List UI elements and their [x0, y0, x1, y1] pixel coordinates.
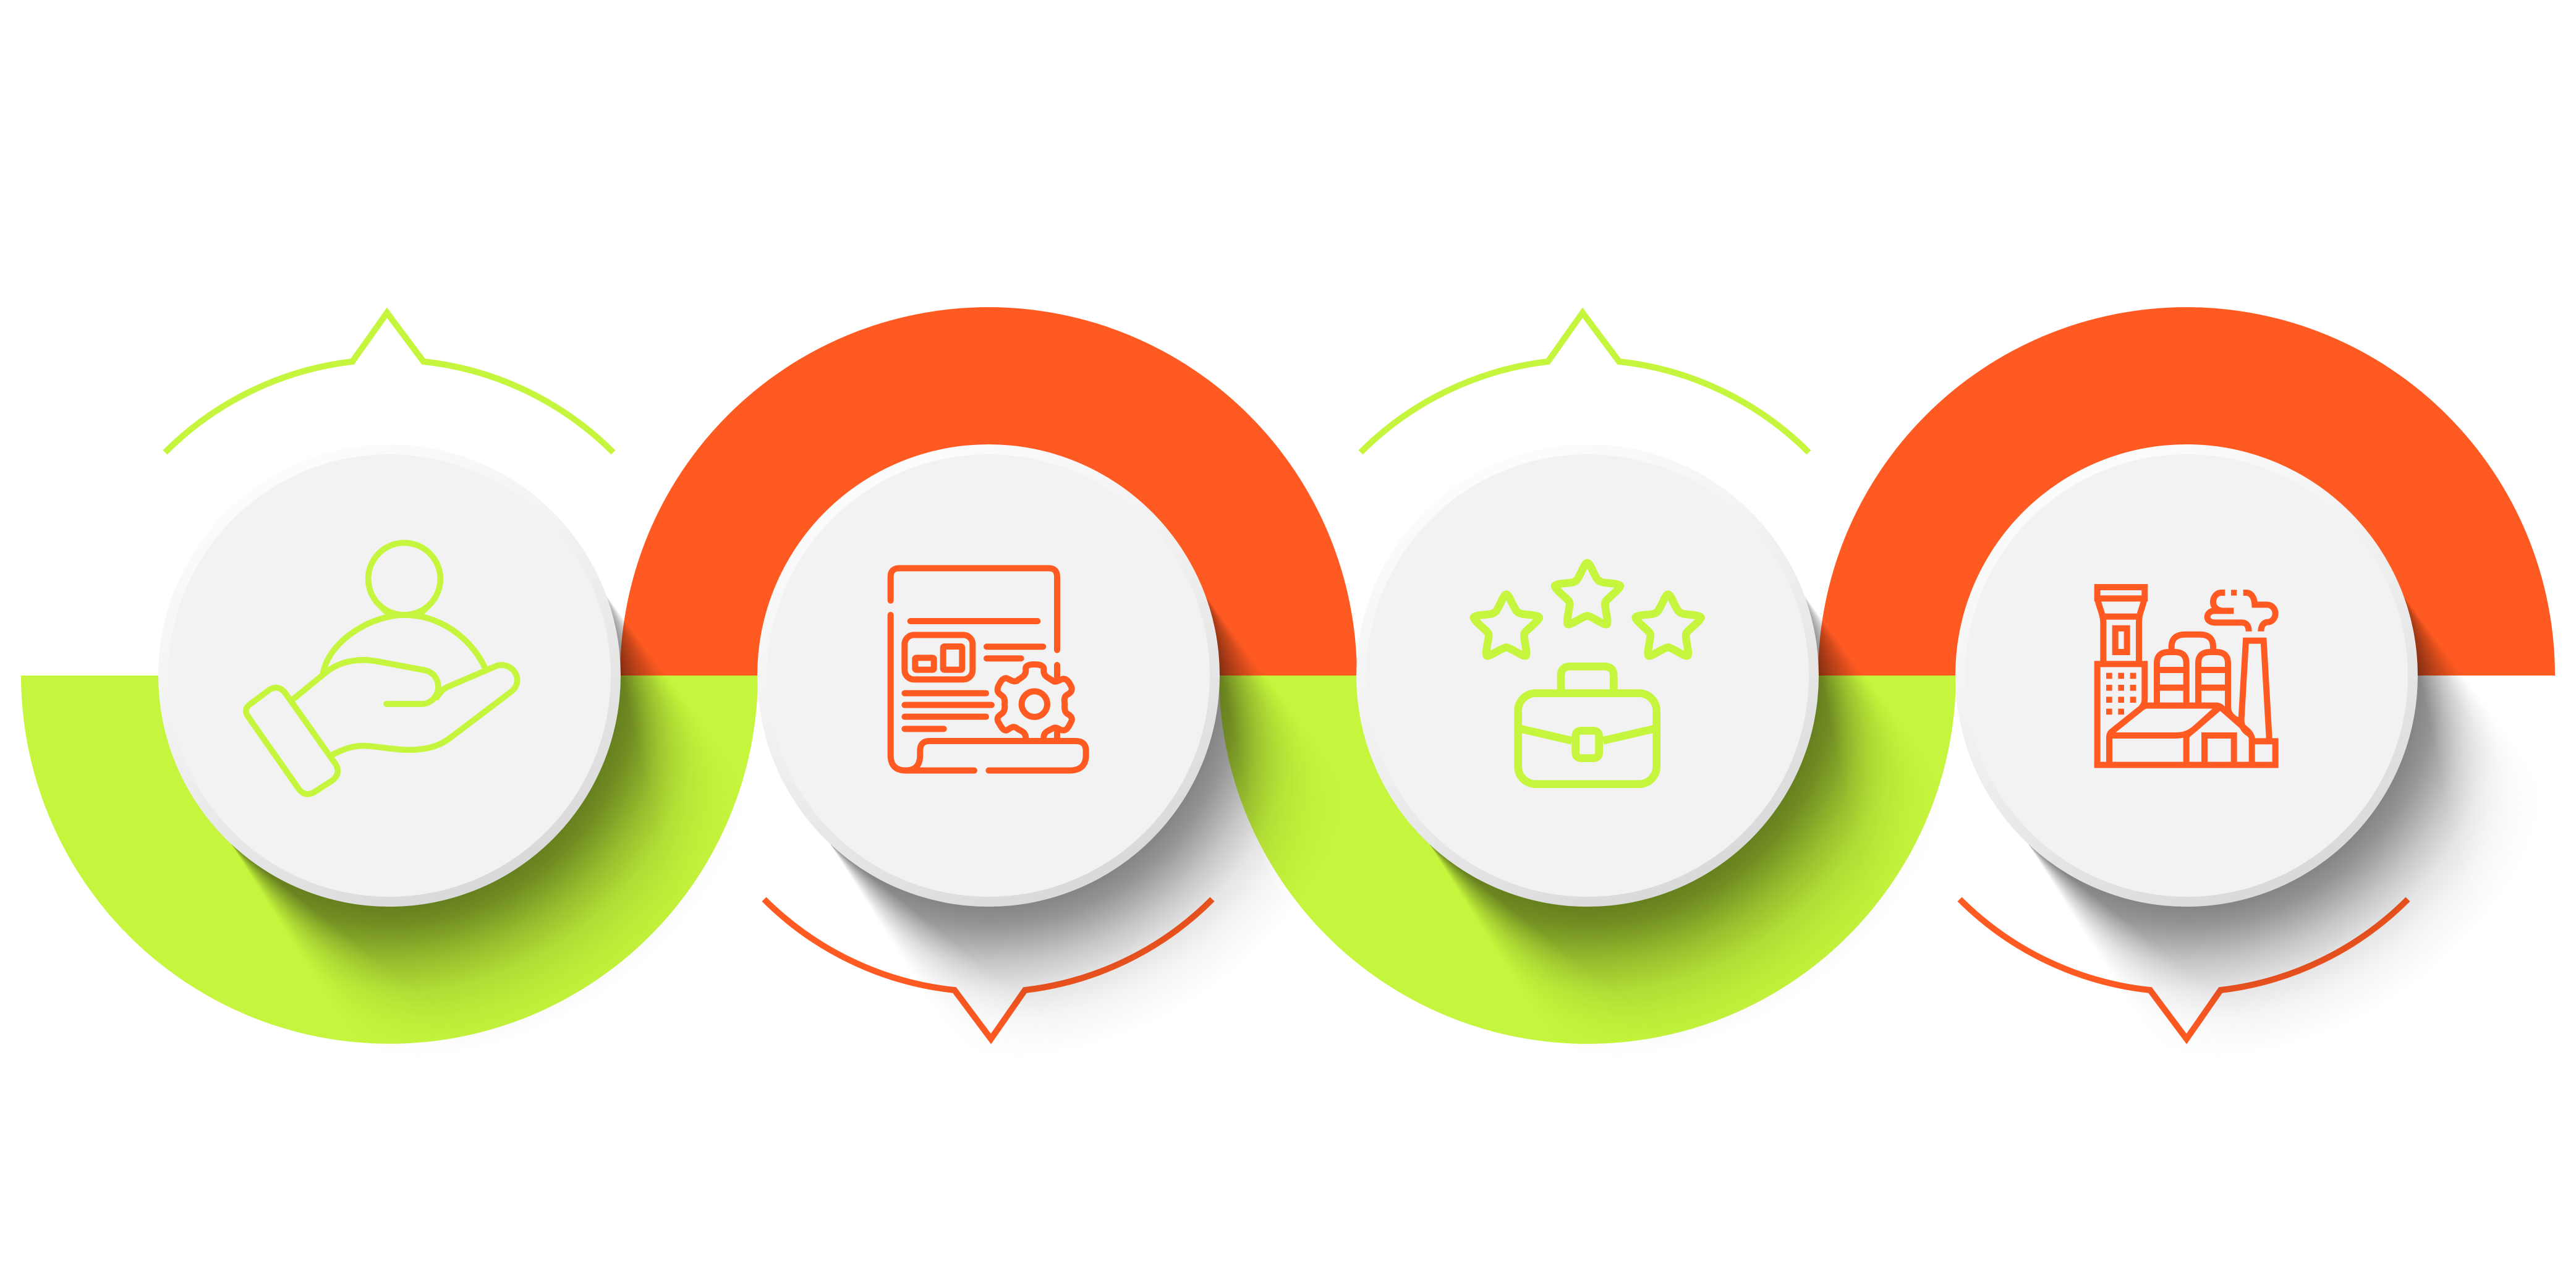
- long shadow step 2: [831, 596, 1303, 1022]
- lime pointer arc above step 3: [1361, 313, 1809, 452]
- orange half circle 2: [620, 307, 1357, 676]
- step 2 disc: [757, 444, 1220, 907]
- lime half circle 1: [21, 676, 758, 1044]
- icon: three stars over briefcase: [1474, 563, 1701, 784]
- step 3 disc: [1356, 444, 1819, 907]
- infographic canvas: [21, 307, 2555, 1044]
- step 4 disc: [1955, 444, 2418, 907]
- orange pointer arc below step 4: [1960, 899, 2408, 1039]
- lime half circle 3: [1219, 676, 1956, 1044]
- orange pointer arc below step 2: [764, 899, 1212, 1039]
- long shadow step 3: [1430, 596, 1902, 1022]
- icon: factory: [2094, 587, 2276, 765]
- orange half circle 4: [1818, 307, 2555, 676]
- step 1 disc: [158, 444, 621, 907]
- icon: person on open hand: [246, 543, 517, 794]
- lime pointer arc above step 1: [165, 313, 613, 452]
- long shadow step 4: [2029, 596, 2501, 1022]
- icon: document with gear: [891, 568, 1086, 771]
- long shadow step 1: [232, 596, 704, 1022]
